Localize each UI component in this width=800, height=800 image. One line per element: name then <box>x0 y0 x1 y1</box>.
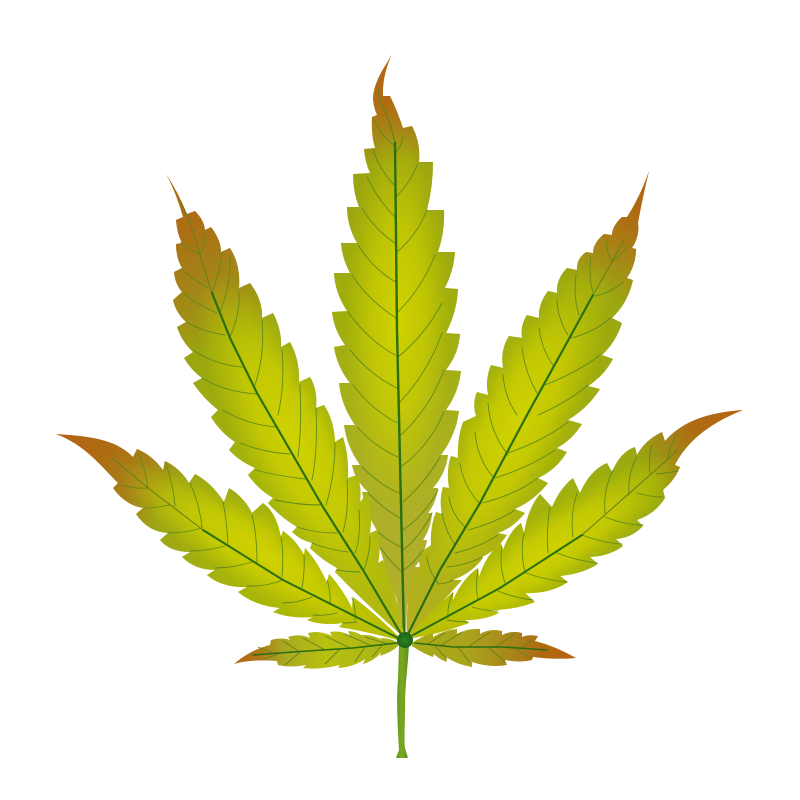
lower right blade <box>410 410 743 638</box>
stem <box>396 645 409 758</box>
upper right side veins <box>427 240 628 584</box>
upper right midrib <box>408 240 624 634</box>
small left veins <box>258 634 388 665</box>
centre midrib <box>378 88 404 636</box>
leaflet: lower left <box>56 434 398 640</box>
leaflet: upper right <box>407 171 649 634</box>
small left blade <box>234 631 400 669</box>
upper left blade <box>166 174 404 634</box>
small right midrib <box>415 643 547 650</box>
leaflet: lower right <box>410 410 743 638</box>
upper left side veins <box>181 235 370 572</box>
lower left blade <box>56 434 398 640</box>
upper left midrib <box>180 200 401 634</box>
lower right midrib <box>413 449 678 635</box>
node <box>397 632 413 648</box>
leaflet: small right <box>412 629 576 667</box>
small right blade <box>412 629 576 667</box>
small left midrib <box>253 643 397 655</box>
leaflet: upper left <box>166 174 404 634</box>
small right veins <box>428 632 532 663</box>
centre side veins <box>348 118 444 572</box>
lower right side veins <box>447 433 678 622</box>
leaflet: centre <box>332 54 461 636</box>
centre blade <box>332 54 461 636</box>
leaflet: small left <box>234 631 400 669</box>
upper right blade <box>407 171 649 634</box>
lower left midrib <box>112 458 398 638</box>
lower left side veins <box>122 453 357 623</box>
